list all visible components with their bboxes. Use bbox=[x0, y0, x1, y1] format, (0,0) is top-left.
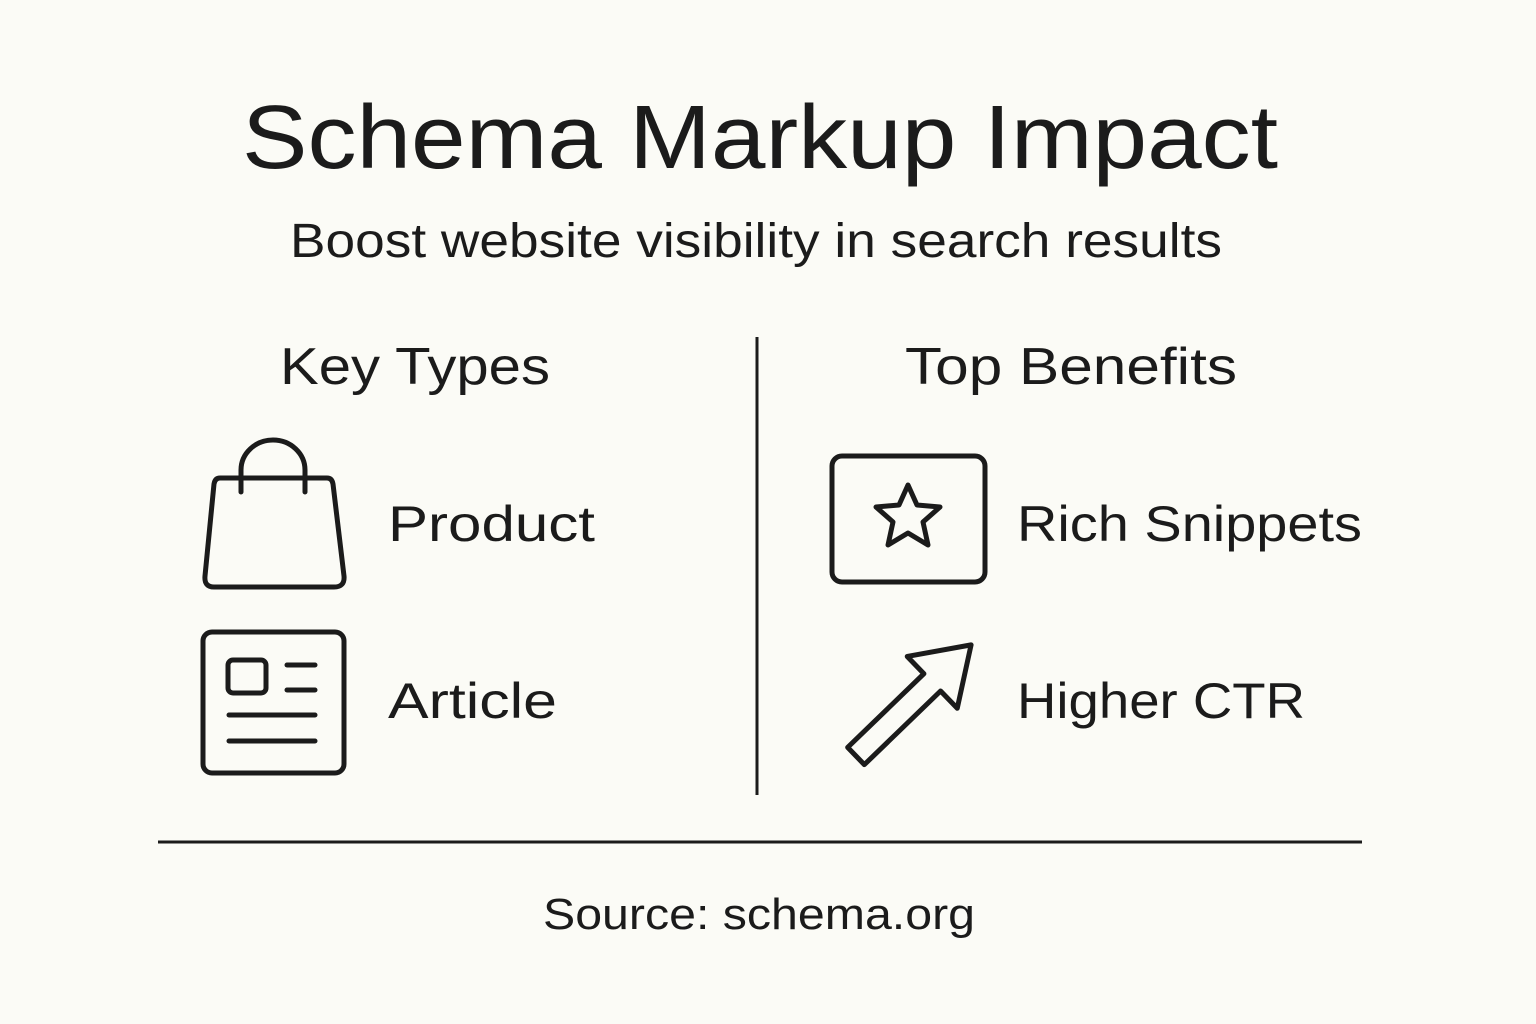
title: Schema Markup Impact bbox=[242, 88, 1278, 188]
panel: top benefits bbox=[831, 338, 1362, 782]
icon: article bbox=[203, 632, 344, 773]
icon: shopping bag bbox=[205, 440, 344, 587]
panel: key types bbox=[203, 338, 595, 773]
label: product: Product bbox=[388, 496, 595, 552]
heading: top benefits: Top Benefits bbox=[905, 338, 1237, 396]
label: rich snippets: Rich Snippets bbox=[1017, 496, 1362, 552]
source: Source: schema.org bbox=[543, 890, 975, 939]
subtitle: Boost website visibility in search results bbox=[290, 215, 1222, 268]
heading: key types: Key Types bbox=[280, 338, 550, 396]
label: article: Article bbox=[388, 673, 557, 729]
label: higher ctr: Higher CTR bbox=[1017, 673, 1305, 729]
icon: arrow up-right bbox=[831, 619, 996, 782]
icon: star box bbox=[832, 456, 985, 582]
